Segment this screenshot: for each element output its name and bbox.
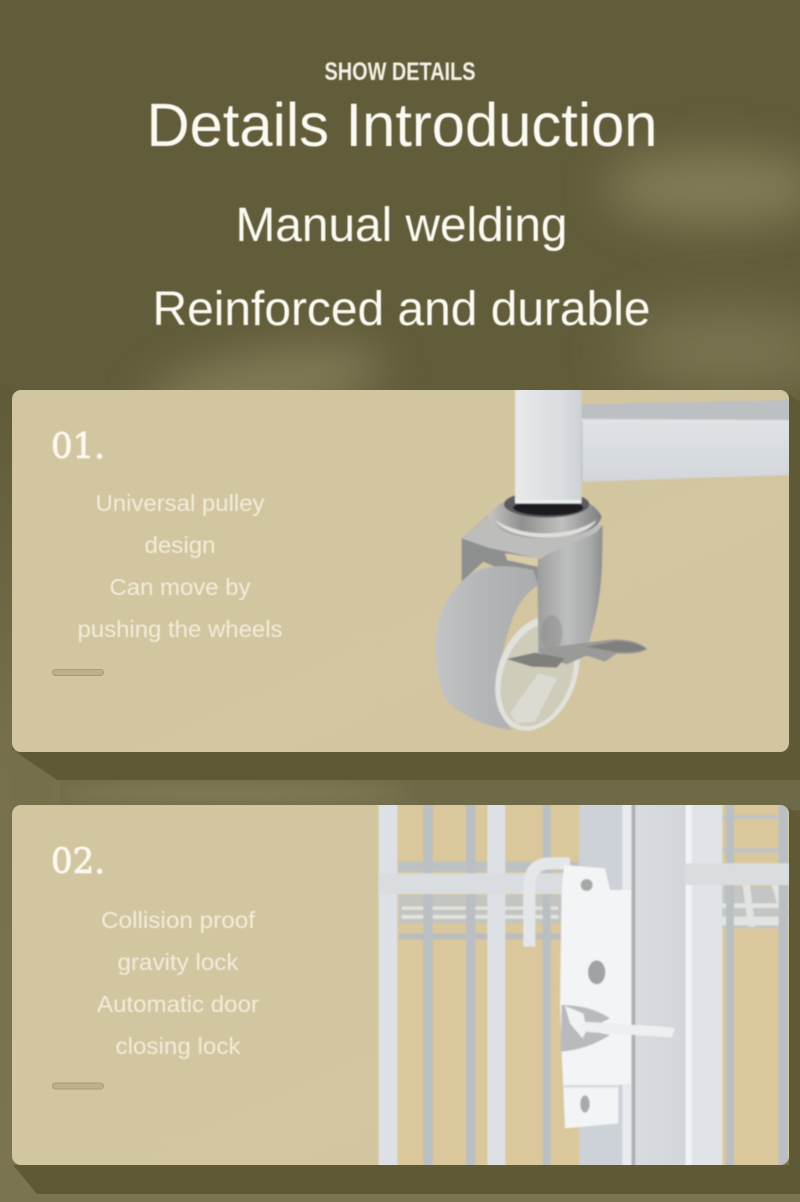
latch pin bbox=[583, 1022, 675, 1037]
text block: pulley description: pushing the wheels bbox=[78, 616, 282, 642]
text block: pulley description: Can move by bbox=[110, 574, 251, 600]
text block: lock description: Collision proof bbox=[101, 907, 256, 933]
photo: door lock bbox=[378, 793, 790, 1173]
card shadow: 01 bbox=[16, 394, 800, 780]
card shadow: 02 bbox=[13, 808, 800, 1194]
post bbox=[515, 378, 582, 503]
pill marker bbox=[52, 1083, 104, 1089]
horizontal rails bbox=[379, 873, 565, 894]
subtitle: reinforced and durable: Reinforced and durable bbox=[152, 283, 650, 336]
fork body bbox=[537, 525, 603, 653]
text block: lock description: gravity lock bbox=[118, 949, 239, 975]
number: 01: 01. bbox=[51, 427, 105, 467]
photo: caster wheel bbox=[435, 378, 790, 743]
lock plate bbox=[560, 865, 631, 1128]
hook bbox=[529, 863, 570, 947]
pill marker bbox=[52, 670, 104, 676]
brake lever bbox=[538, 639, 647, 664]
text block: lock description: closing lock bbox=[116, 1033, 241, 1059]
rail over post right bbox=[685, 863, 790, 885]
text block: pulley description: Universal pulley bbox=[96, 490, 265, 516]
panel: card 01 universal pulley bbox=[12, 378, 790, 752]
title: Details Introduction bbox=[146, 91, 658, 159]
text block: lock description bbox=[97, 907, 259, 1059]
swivel ring bbox=[489, 502, 602, 538]
text block: pulley description: design bbox=[144, 532, 216, 558]
panel: card 02 gravity lock bbox=[12, 793, 790, 1173]
subtitle: manual welding: Manual welding bbox=[236, 199, 568, 252]
wire shelf bbox=[398, 862, 578, 872]
post bbox=[578, 805, 623, 1165]
wheel tyre bbox=[435, 566, 538, 730]
vertical wires bbox=[423, 793, 788, 1173]
text block: lock description: Automatic door bbox=[97, 991, 259, 1017]
fork back leg bbox=[462, 515, 540, 585]
number: 02: 02. bbox=[51, 842, 105, 882]
eyebrow: show details: SHOW DETAILS bbox=[324, 58, 476, 86]
text block: pulley description bbox=[78, 490, 282, 642]
horizontal bar bbox=[582, 400, 790, 420]
wheel hub bbox=[494, 617, 580, 732]
